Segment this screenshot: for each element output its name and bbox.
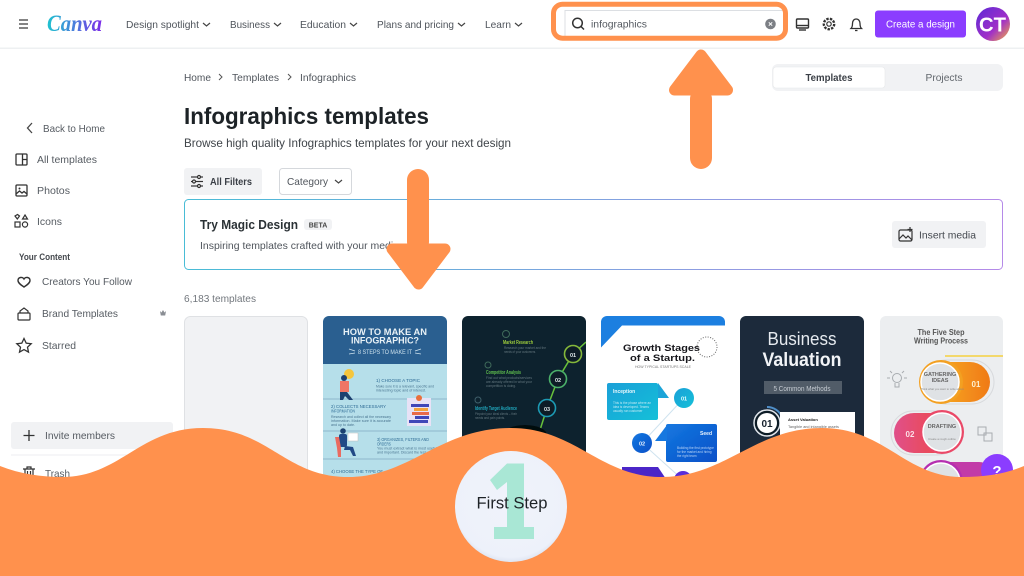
template card: Growth Stages of a Startup: 02 [639,442,645,448]
orange highlight outline [554,4,786,38]
panel: Try Magic Design: Try Magic Design [200,218,298,232]
template card: How to make an infographic: Make sure it is a relevant, specific and [376,384,434,388]
navigation links: Design spotlight [126,19,199,31]
template card: The Five Step Writing Process: IDEAS [932,378,949,384]
button: Category: Category [287,176,329,188]
navigation links: Business [230,19,270,31]
tabs: Templates / Projects: Templates [806,72,853,84]
template card: How to make an infographic: Research and collect all the necessary [331,415,391,419]
icon: desktop [796,19,808,30]
template card: Growth Stages of a Startup: the right team [677,454,697,458]
tabs: Templates / Projects [772,64,1003,91]
template card: The Five Step Writing Process: 02 [906,430,915,439]
template card: How to make an infographic: information. Make sure it is accurate [331,419,391,423]
figure: person lifting bulb [340,369,354,400]
sidebar [11,123,173,480]
template card: The Five Step Writing Process: Create a rough outline [928,437,956,441]
template card: dark timeline: needs and pain points. [475,416,505,420]
panel: Try Magic Design: Inspiring templates crafted with your media [200,240,399,252]
sidebar heading: Your Content: Your Content [19,252,70,262]
template card: blank loading [184,316,308,492]
template card: How to make an infographic [323,316,447,491]
template card: Growth Stages of a Startup [601,316,725,491]
arrow down to templates [392,169,445,284]
template card: dark timeline: Competitor Analysis [486,370,521,376]
template card: dark timeline: needs of your customers. [504,350,536,354]
icon: puzzle [978,427,992,441]
template card: Growth Stages of a Startup: for the market and hiring [677,450,712,454]
sidebar link: Icons: Icons [37,216,62,228]
template card: dark timeline: Find out what products/services [486,376,532,380]
button: All Filters: All Filters [210,176,252,188]
sidebar link: Starred [17,338,76,352]
heading: Infographics templates [184,103,429,129]
navigation links: Education [300,19,346,31]
sidebar link: Brand Templates [18,308,166,320]
template card: Growth Stages of a Startup: Growth Stages [623,343,700,354]
template card: Growth Stages of a Startup: of a Startup. [630,353,695,364]
sidebar link: Photos [16,185,70,197]
breadcrumb: Templates [232,72,279,84]
icon: light bulb [887,371,907,387]
subheading: Browse high quality Infographics templates for your next design [184,136,511,150]
template card: Growth Stages of a Startup: Seed [700,431,712,437]
navigation links [126,19,522,31]
template card: How to make an infographic: HOW TO MAKE AN [343,327,427,338]
sidebar link: All templates: All templates [37,154,97,166]
avatar: CT [976,7,1010,41]
template card: How to make an infographic: 8 STEPS TO MAKE IT [358,350,412,356]
template card: The Five Step Writing Process: Writing Process [914,336,968,346]
sidebar link: Starred: Starred [42,340,76,352]
sidebar link: Brand Templates: Brand Templates [42,308,118,320]
logo: Canva: Canva [47,11,102,36]
template card: Growth Stages of a Startup: 01 [681,396,687,402]
template card: Growth Stages of a Startup: This is the phase where an [613,401,651,405]
template card: How to make an infographic: ORDERS [377,442,391,448]
sidebar link: Trash [23,467,70,480]
template card: How to make an infographic: and important. Discard the less useful [377,450,437,454]
label: First Step [476,494,548,512]
template card: How to make an infographic: 3) ORGANIZES, FILTERS AND [377,437,429,443]
breadcrumb [184,72,356,84]
arrow up to search box [674,55,728,169]
template card: The Five Step Writing Process: The Five Step [918,328,965,337]
template card: dark timeline: Market Research [503,340,533,346]
help button [981,454,1013,486]
template card: dark timeline: Research your market and the [504,346,546,350]
template card: dark timeline: competition is doing. [486,384,516,388]
icon: clear [765,19,776,29]
sidebar button: Invite members [11,422,173,449]
sidebar button: Invite members: Invite members [45,430,115,442]
template card: dark timeline: Identify Target Audience [475,406,517,412]
button: Category [280,168,352,194]
tabs: Templates / Projects: Projects [926,72,962,84]
orange wave footer [0,428,1024,576]
template card: Business Valuation: 01 [761,419,773,430]
template card: Growth Stages of a Startup: usually run customer [613,409,643,413]
template card: The Five Step Writing Process: Think what you want to write about [920,387,964,391]
numeral 1 [490,464,534,539]
template card: How to make an infographic: INFORMATION [331,408,355,414]
badge: BETA [304,219,332,230]
figure: person at computer [335,428,358,457]
button: All Filters [184,168,262,195]
sidebar link: Icons [15,214,62,228]
template card: dark timeline: are already offered in what your [486,380,533,384]
template card: dark timeline: 02 [555,378,561,384]
template count: 6,183 templates [184,293,256,305]
breadcrumb: Home [184,72,211,84]
template card: Business Valuation: Business [768,329,836,349]
button: Create a design: Create a design [886,18,955,30]
template card: dark timeline: Pinpoint your ideal clients – their [475,412,518,416]
template card: Growth Stages of a Startup: Building the first prototype [677,446,714,450]
avatar: CT: CT [979,14,1006,36]
navigation links: Learn [485,19,511,31]
template card: How to make an infographic: interesting topic and of interest. [376,388,426,392]
template card: How to make an infographic: and up to date. [331,423,355,427]
template card: The Five Step Writing Process: 01 [972,380,981,389]
navigation links: Plans and pricing [377,19,454,31]
template card: The Five Step Writing Process: DRAFTING [928,424,956,430]
template card: How to make an infographic: You must extract what is most useful [377,446,437,450]
template card: dark timeline: 01 [570,353,576,359]
breadcrumb: Infographics [300,72,356,84]
template card: The Five Step Writing Process: GATHERING [924,372,956,378]
template card: Growth Stages of a Startup: HOW TYPICAL STARTUPS SCALE [635,365,691,369]
search box highlighted [554,4,786,38]
top navigation bar [0,0,1024,49]
button: Insert media: Insert media [919,230,976,242]
icon: settings gear [824,19,834,29]
button: Create a design [875,10,966,38]
template card: How to make an infographic: 1) CHOOSE A TOPIC [376,378,420,384]
template card: Business Valuation: Asset Valuation [788,417,818,422]
sidebar link: Photos: Photos [37,185,70,197]
icon: bell [851,19,862,30]
panel: Try Magic Design [184,200,1002,270]
template card: Growth Stages of a Startup: idea is developed. Teams [613,405,649,409]
template card: Business Valuation: Tangible and intangible assets [788,425,839,429]
template card: Business Valuation [740,316,864,453]
step badge: First Step [455,451,567,562]
badge: BETA: BETA [309,222,327,230]
sidebar link: Trash: Trash [45,468,70,480]
figure: stack of books [407,395,431,426]
template card: How to make an infographic: INFOGRAPHIC? [351,336,419,346]
template card: dark timeline [462,316,586,452]
template card: Growth Stages of a Startup: Inception [613,389,635,395]
template card: The Five Step Writing Process [880,316,1003,477]
template card: Business Valuation: 5 Common Methods [774,386,831,393]
sidebar link: Back to Home: Back to Home [43,123,105,135]
template card: How to make an infographic: 2) COLLECTS NECESSARY [331,404,387,410]
help button: ? [992,463,1002,480]
icon: hamburger menu [19,20,28,28]
search text: infographics [591,18,647,30]
icon: magnifier [573,18,584,30]
sidebar link: Creators You Follow: Creators You Follow [42,276,132,288]
template card: Business Valuation: Valuation [762,350,842,371]
template card: How to make an infographic: 4) CHOOSE THE TYPE OF [331,469,383,475]
button: Insert media [892,221,986,248]
template card: dark timeline: 03 [544,407,550,413]
